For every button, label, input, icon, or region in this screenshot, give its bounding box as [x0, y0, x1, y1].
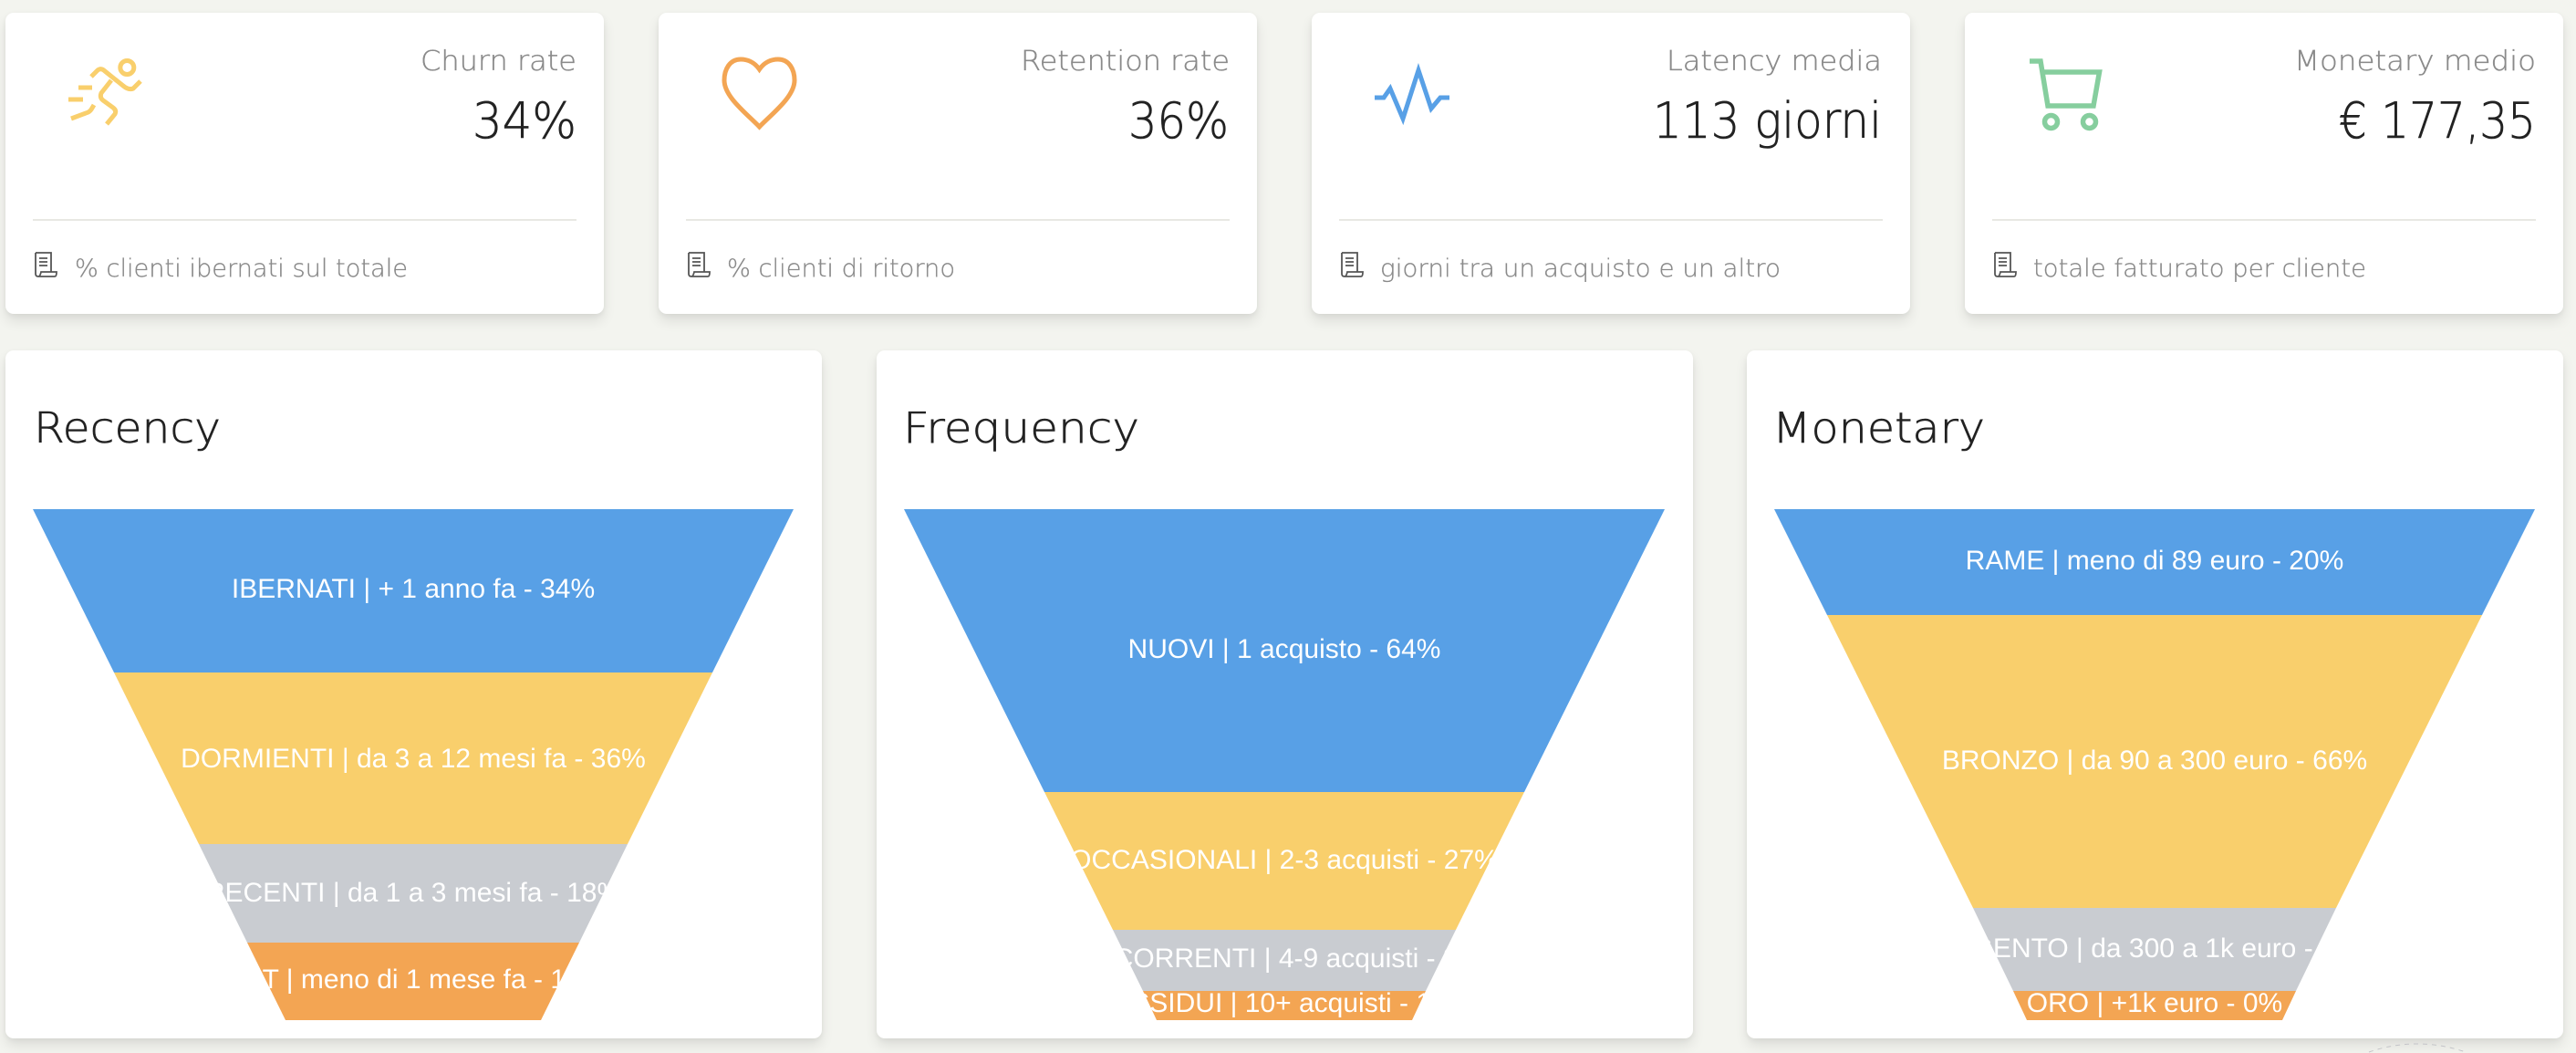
- segment: argento: ARGENTO | da 300 a 1k euro - 14%: [1934, 933, 2375, 964]
- icon: document: [689, 253, 710, 276]
- text: churn description: % clienti ibernati sul totale: [75, 255, 408, 283]
- icon: shopping cart: [2030, 61, 2100, 128]
- icon: document: [1995, 253, 2016, 276]
- value: 36%: 36%: [1128, 92, 1229, 150]
- heading: Frequency: Frequency: [903, 403, 1139, 453]
- segment: recenti: RECENTI | da 1 a 3 mesi fa - 18%: [205, 878, 621, 908]
- segment: nuovi: NUOVI | 1 acquisto - 64%: [1128, 634, 1440, 664]
- value: 34%: 34%: [473, 92, 576, 150]
- icon: document: [36, 253, 57, 276]
- segment: ibernati: [33, 509, 794, 672]
- panel: retention rate card: [659, 13, 1257, 314]
- segment: argento: [1934, 908, 2375, 991]
- panel: frequency funnel: [877, 350, 1693, 1038]
- heading: Monetary: Monetary: [1772, 403, 1985, 453]
- heading: Recency: Recency: [34, 403, 221, 453]
- segment: recenti: [199, 844, 628, 943]
- panel: latency card: [1312, 13, 1910, 314]
- heading: Retention rate: Retention rate: [1021, 46, 1230, 78]
- segment: bronzo: BRONZO | da 90 a 300 euro - 66%: [1942, 745, 2367, 776]
- panel: monetary funnel: [1747, 350, 2563, 1038]
- segment: occasionali: [1044, 792, 1524, 930]
- panel: monetary average card: [1965, 13, 2563, 314]
- value: € 177,35: € 177,35: [2339, 92, 2536, 150]
- segment: rame: RAME | meno di 89 euro - 20%: [1966, 546, 2343, 576]
- segment: rame: [1774, 509, 2535, 615]
- segment: ricorrenti: [1086, 930, 1482, 991]
- value: 113 giorni: 113 giorni: [1653, 92, 1882, 150]
- segment: ricorrenti: RICORRENTI | 4-9 acquisti - 8%: [1086, 944, 1482, 974]
- segment: oro: ORO | +1k euro - 0%: [2027, 988, 2282, 1018]
- chart: frequency funnel: [904, 509, 1665, 1020]
- text: latency description: giorni tra un acquisto e un altro: [1380, 255, 1781, 283]
- panel: churn rate card: [5, 13, 604, 314]
- segment: occasionali: OCCASIONALI | 2-3 acquisti - 27%: [1070, 845, 1499, 875]
- heading: Latency media: Latency media: [1667, 46, 1882, 78]
- chart: recency funnel: [33, 509, 794, 1020]
- icon: document: [1342, 253, 1363, 276]
- icon: running person: [68, 60, 140, 124]
- text: monetary description: totale fatturato per cliente: [2033, 255, 2366, 283]
- icon: heart: [724, 59, 795, 127]
- icon: pulse line: [1375, 70, 1449, 119]
- segment: assidui: ASSIDUI | 10+ acquisti - 1%: [1113, 988, 1456, 1018]
- segment: nuovi: [904, 509, 1665, 792]
- segment: hot: HOT | meno di 1 mese fa - 12%: [222, 964, 605, 995]
- heading: Churn rate: Churn rate: [421, 46, 576, 78]
- segment: dormienti: [114, 672, 712, 844]
- chart: monetary funnel: [1774, 509, 2535, 1020]
- segment: ibernati: IBERNATI | + 1 anno fa - 34%: [232, 574, 595, 604]
- segment: bronzo: [1827, 615, 2482, 908]
- heading: Monetary medio: Monetary medio: [2294, 46, 2536, 78]
- text: retention description: % clienti di ritorno: [727, 255, 955, 283]
- segment: dormienti: DORMIENTI | da 3 a 12 mesi fa - 36%: [181, 744, 646, 774]
- panel: recency funnel: [5, 350, 822, 1038]
- segment: hot: [222, 943, 605, 1020]
